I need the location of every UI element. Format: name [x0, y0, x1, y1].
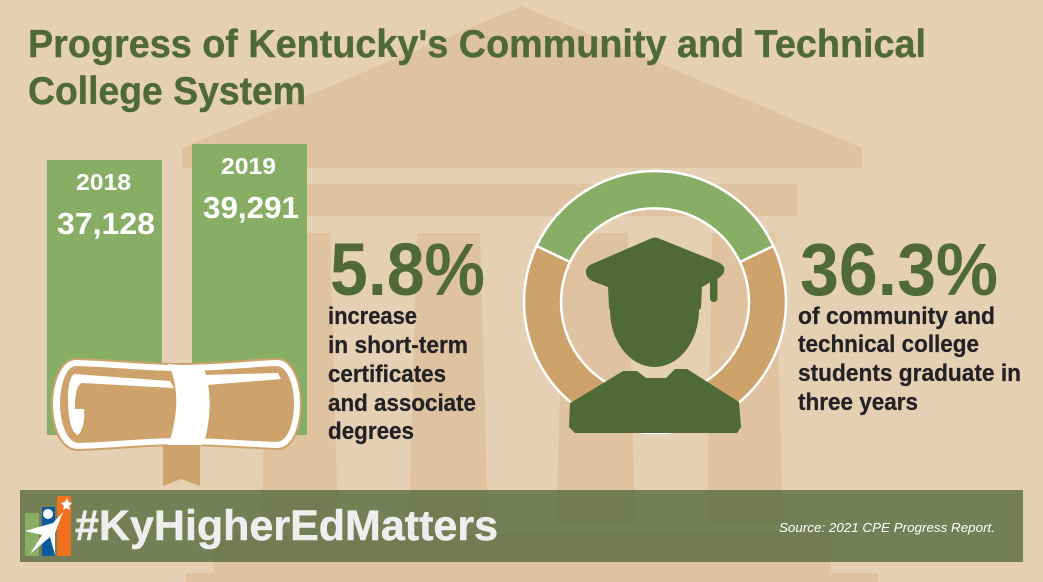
stat: 5.8%: 5.8% — [330, 228, 485, 311]
stat: 36.3%: 36.3% — [800, 228, 998, 311]
text: graduation description — [798, 303, 1021, 416]
text: increase description: increase — [328, 303, 417, 330]
text: increase description: degrees — [328, 418, 414, 445]
background: classical building — [182, 6, 878, 582]
bar: 2019: 2019 — [221, 153, 276, 179]
footer banner — [20, 490, 1023, 562]
text: graduation description: students graduate in — [798, 360, 1021, 387]
icon: logo — [25, 496, 72, 556]
donut chart: 36.3% — [524, 171, 786, 433]
bar: 2019: 39,291 — [203, 190, 299, 225]
text: increase description: and associate — [328, 390, 476, 417]
bar: 2018 — [47, 160, 162, 435]
bar: 2018: 37,128 — [57, 206, 155, 241]
bar: 2018: 2018 — [76, 169, 131, 195]
text: increase description — [328, 303, 476, 445]
title — [28, 23, 926, 113]
icon: diploma — [51, 358, 302, 486]
source note: Source: 2021 CPE Progress Report. — [779, 520, 995, 535]
text: increase description: in short-term — [328, 332, 468, 359]
text: increase description: certificates — [328, 361, 446, 388]
bar: 2019 — [192, 144, 307, 435]
text: graduation description: technical college — [798, 331, 979, 358]
title: Progress of Kentucky's Community and Technical — [28, 23, 926, 66]
icon: graduate — [569, 238, 741, 433]
text: graduation description: three years — [798, 389, 918, 416]
hashtag: #KyHigherEdMatters — [75, 502, 498, 550]
text: graduation description: of community and — [798, 303, 995, 330]
title: College System — [28, 70, 306, 113]
